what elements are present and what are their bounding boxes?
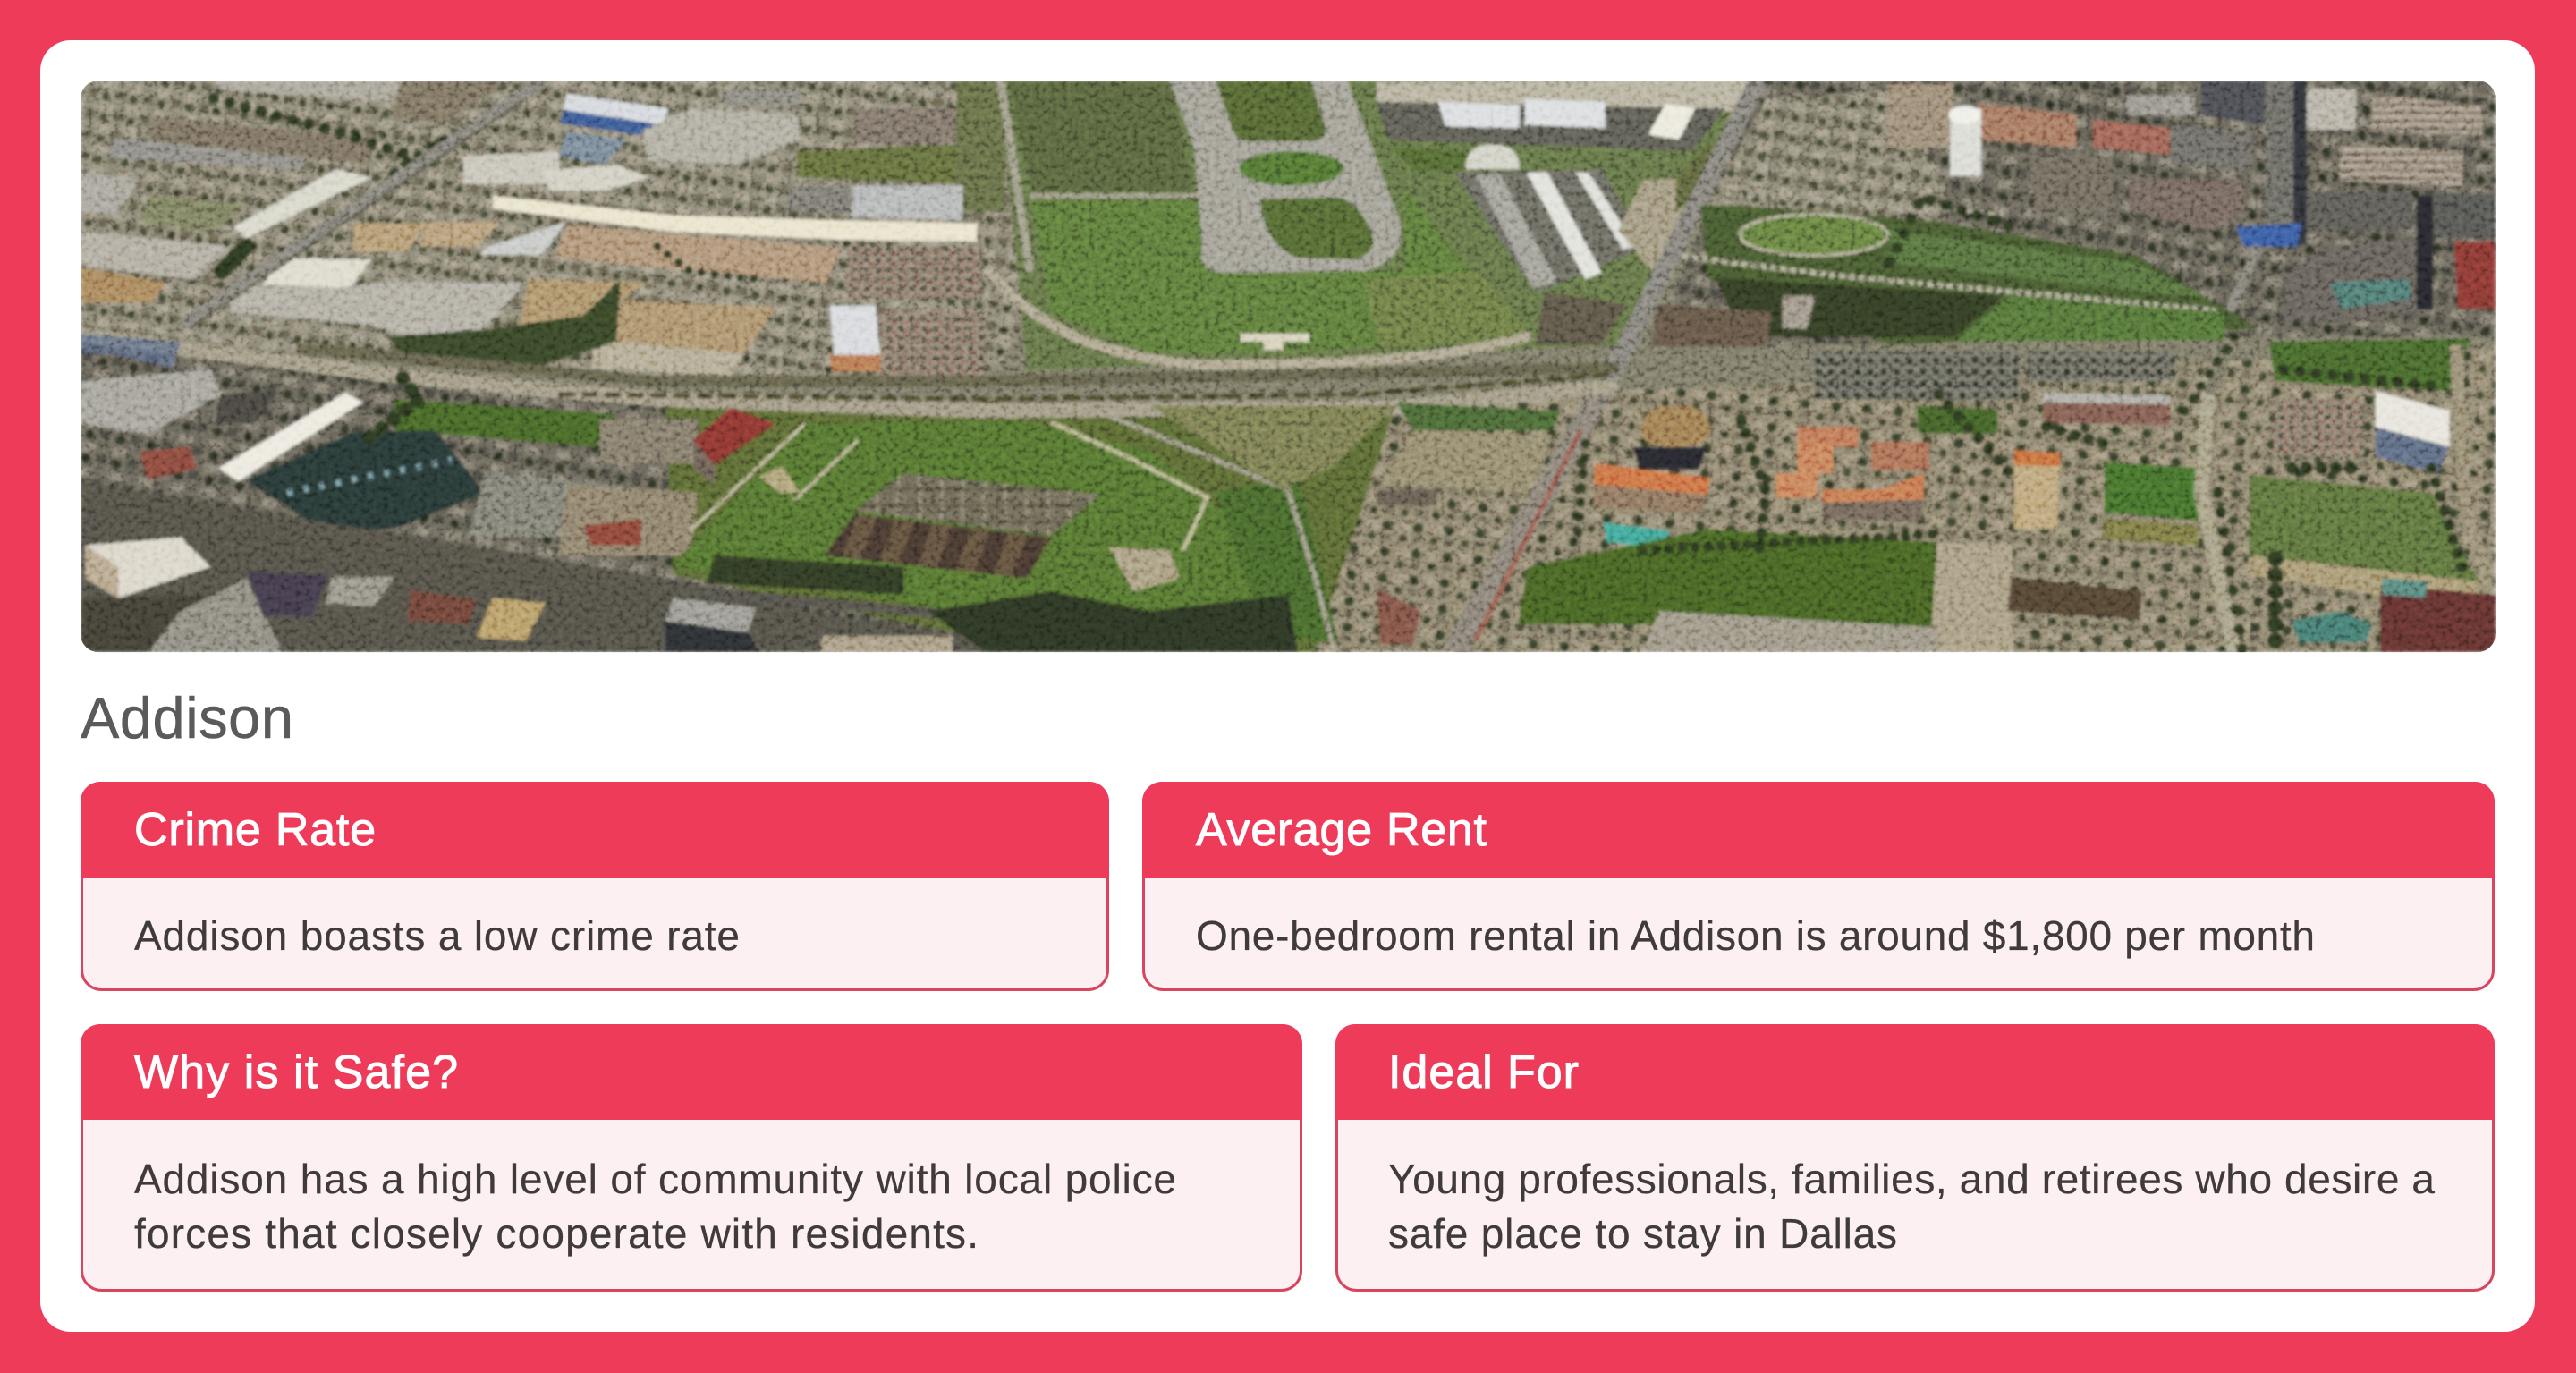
body text: safe place to stay in Dallas xyxy=(1388,1210,1897,1257)
body text: One-bedroom rental in Addison is around $1,800 per month xyxy=(1196,912,2315,959)
upper right neighbourhood xyxy=(1887,84,1953,148)
card: Crime Rate xyxy=(80,782,1109,989)
body text: Addison has a high level of community with local police xyxy=(134,1156,1176,1202)
transit band xyxy=(80,335,1618,411)
airport xyxy=(1007,81,1194,192)
lower right buildings xyxy=(1396,403,1561,430)
header label: Ideal For xyxy=(1388,1047,1579,1098)
card header: Crime Rate xyxy=(80,782,1109,878)
body text: forces that closely cooperate with residents. xyxy=(134,1210,979,1257)
park with oval lawn xyxy=(1700,206,2259,345)
body text xyxy=(134,1156,1176,1257)
card header: Ideal For xyxy=(1335,1024,2495,1120)
body text: Addison boasts a low crime rate xyxy=(134,912,740,959)
header label: Why is it Safe? xyxy=(134,1047,458,1098)
main diagonal road xyxy=(1602,81,1758,394)
card: Ideal For xyxy=(1335,1024,2495,1290)
photo texture xyxy=(80,81,2496,652)
header label: Average Rent xyxy=(1196,804,1487,856)
upper left buildings xyxy=(214,81,402,102)
heading: Addison: Addison xyxy=(80,685,293,750)
card header: Average Rent xyxy=(1142,782,2495,878)
card: Average Rent xyxy=(1142,782,2495,989)
lower middle field xyxy=(670,420,1323,644)
card: Why is it Safe? xyxy=(80,1024,1302,1290)
body text: Young professionals, families, and retirees who desire a xyxy=(1388,1156,2435,1202)
card header: Why is it Safe? xyxy=(80,1024,1302,1120)
aerial photo of Addison xyxy=(80,79,2496,652)
header label: Crime Rate xyxy=(134,804,376,856)
lower left xyxy=(80,369,222,434)
body text xyxy=(1388,1156,2435,1257)
